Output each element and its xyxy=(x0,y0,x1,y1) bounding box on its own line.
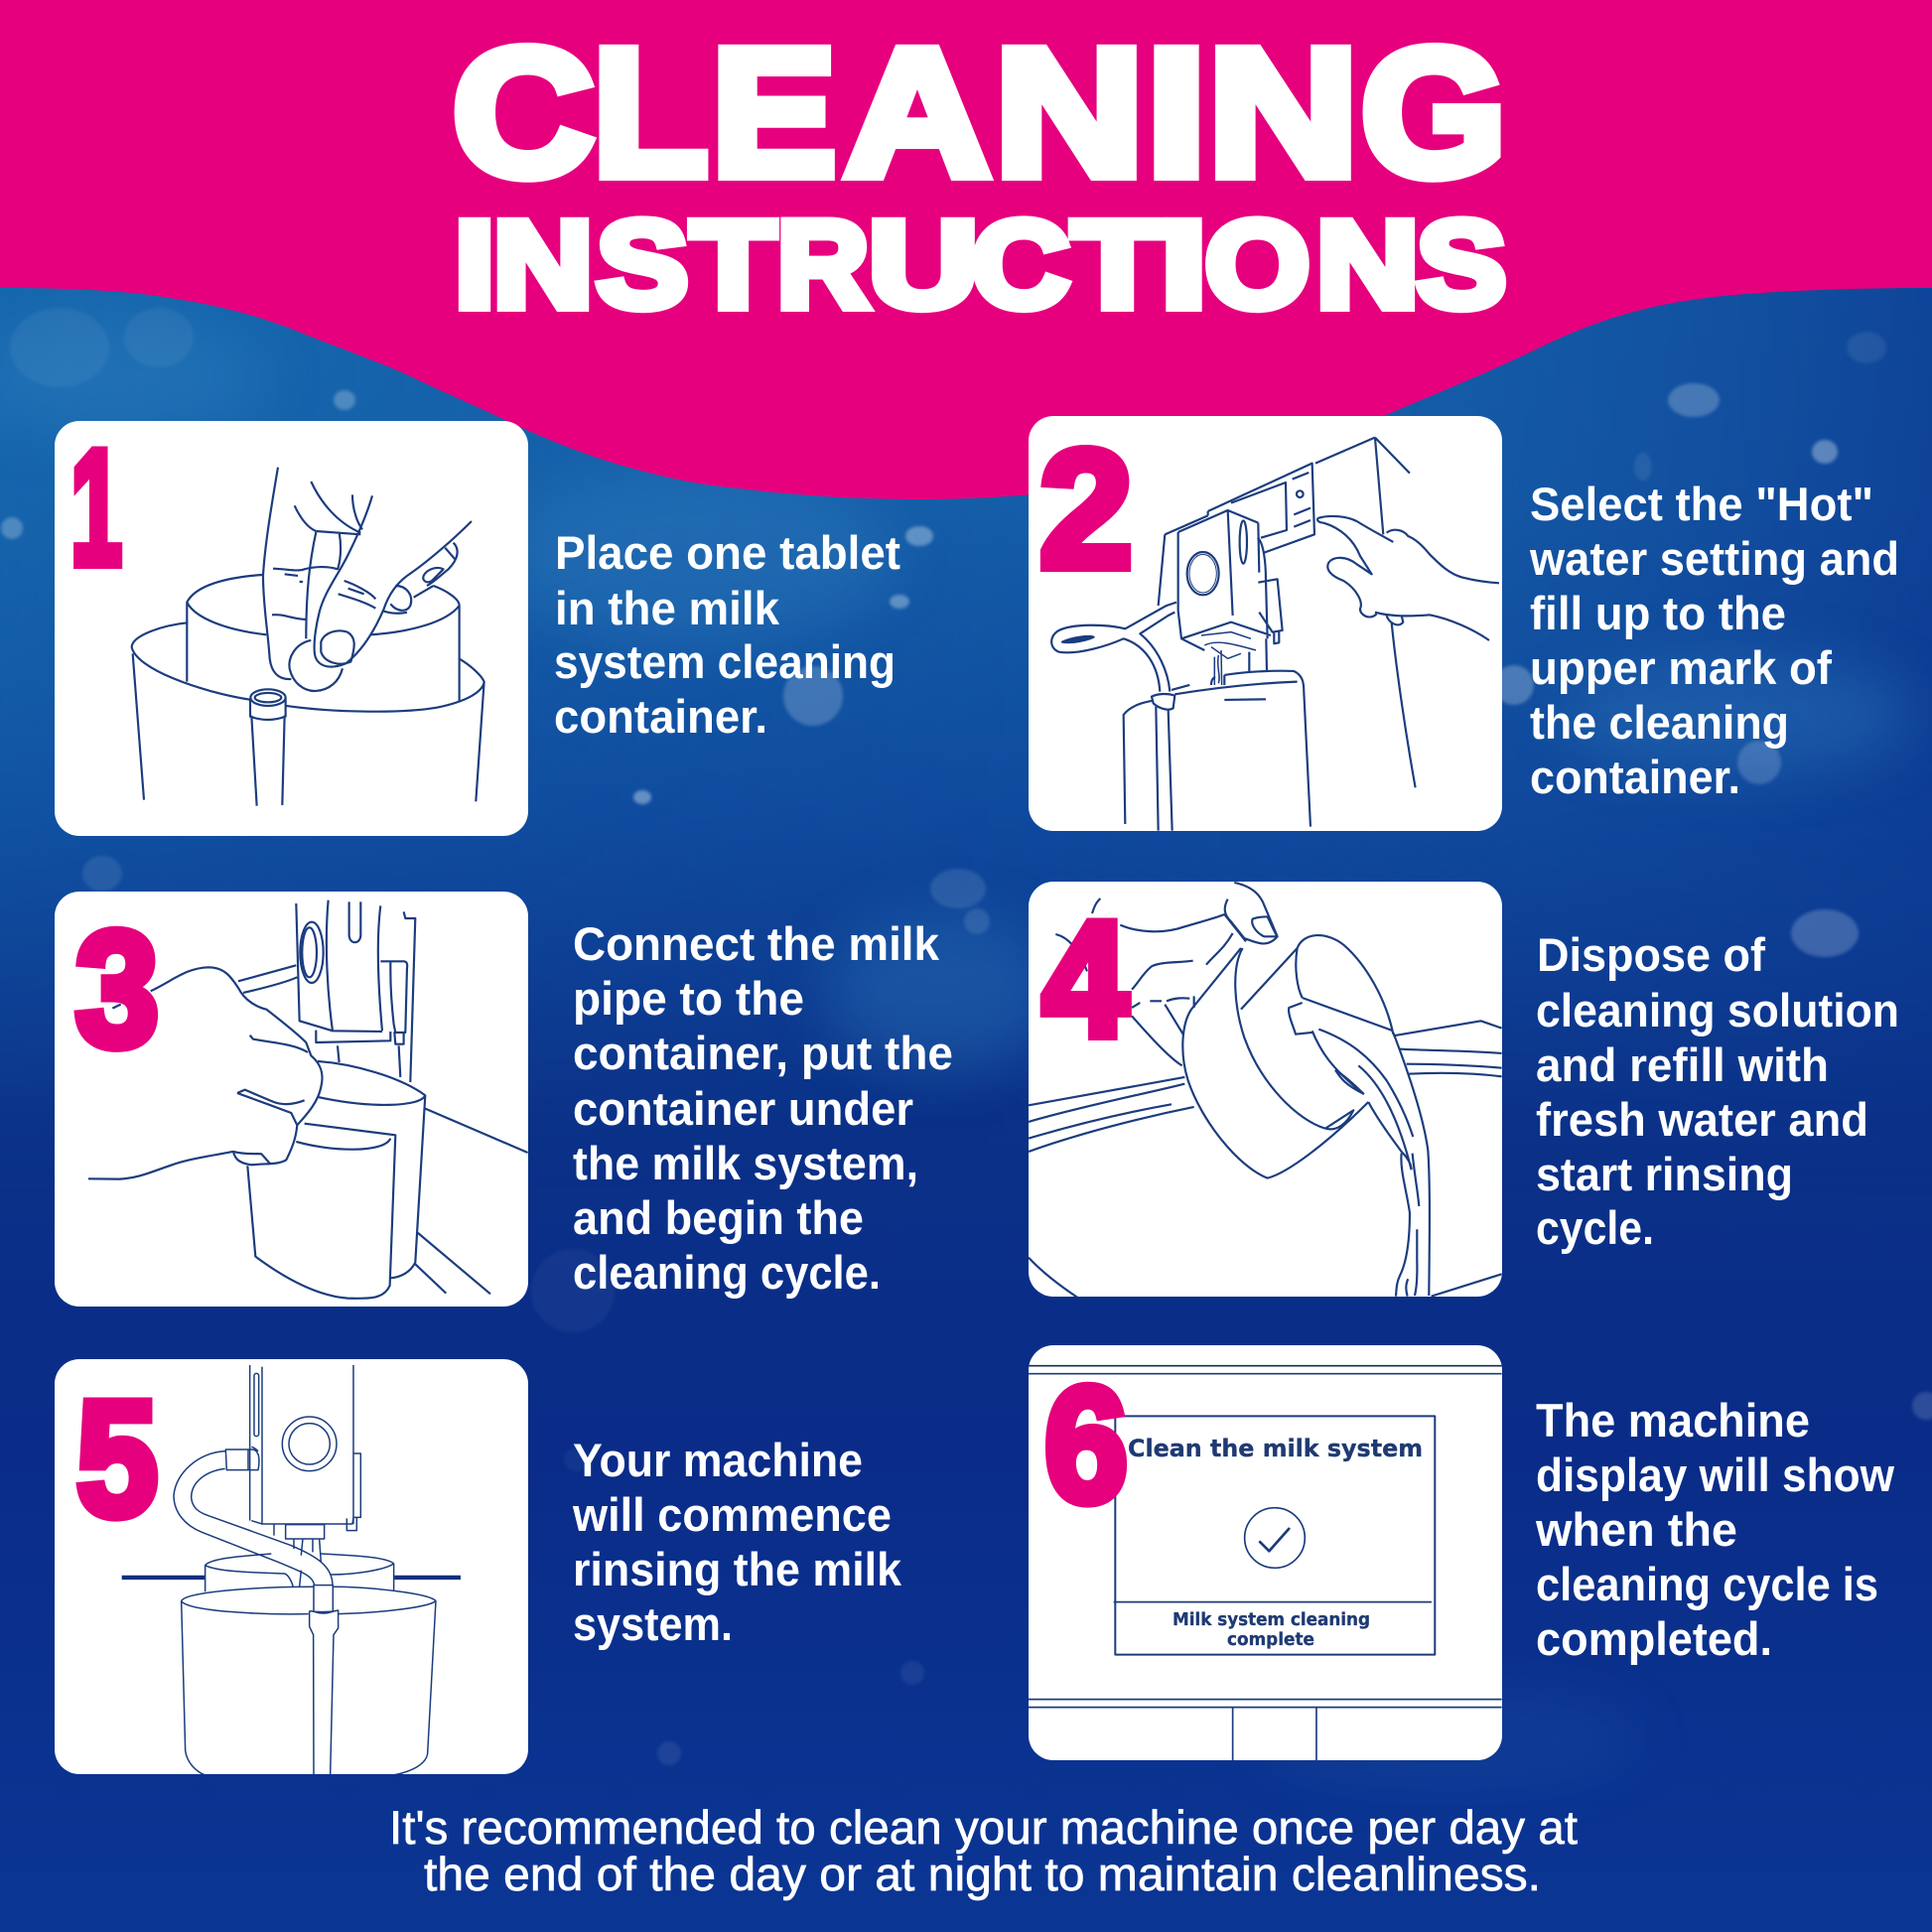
text: step 5: will commence xyxy=(572,1488,892,1541)
pink header wave xyxy=(0,0,1932,499)
number 4: 4 xyxy=(1042,888,1128,1070)
panel: step 4 xyxy=(1029,882,1502,1298)
text: step 1 xyxy=(554,526,900,743)
text: step 2: container. xyxy=(1530,751,1740,803)
background: blue water with bokeh xyxy=(0,288,1932,1777)
title: L xyxy=(593,11,708,213)
title: C xyxy=(972,197,1069,334)
display text: Milk system cleaning xyxy=(1173,1609,1370,1630)
title xyxy=(453,11,1506,334)
text: step 2: the cleaning xyxy=(1530,696,1789,749)
number 5: 5 xyxy=(76,1367,158,1550)
footer note xyxy=(389,1801,1578,1900)
number 1: 1 xyxy=(70,416,122,599)
text: step 4: start rinsing xyxy=(1536,1148,1793,1200)
text: step 4: cycle. xyxy=(1536,1201,1654,1254)
title: U xyxy=(869,197,978,334)
illustration: selecting hot water on machine xyxy=(1051,438,1499,831)
illustration: pouring out cleaning solution xyxy=(1029,883,1502,1298)
text: step 6 xyxy=(1535,1394,1894,1665)
text: step 5: Your machine xyxy=(573,1434,863,1486)
text: step 6: The machine xyxy=(1536,1394,1810,1447)
title: I xyxy=(1162,197,1206,334)
text: step 5: system. xyxy=(573,1597,733,1650)
title: T xyxy=(1072,197,1163,334)
title: I xyxy=(1147,11,1206,213)
text: step 6: cleaning cycle is xyxy=(1536,1558,1878,1610)
text: step 3 xyxy=(573,917,953,1299)
title: I xyxy=(455,197,494,334)
text: step 3: the milk system, xyxy=(573,1137,918,1189)
text: step 1: Place one tablet xyxy=(555,526,900,579)
text: step 2: Select the "Hot" xyxy=(1530,478,1873,530)
title: N xyxy=(995,11,1144,213)
number 3: 3 xyxy=(75,897,159,1080)
text: step 4: cleaning solution xyxy=(1536,984,1899,1036)
illustration: machine rinsing milk system xyxy=(122,1365,461,1775)
title: N xyxy=(1316,197,1419,334)
text: step 5 xyxy=(572,1434,902,1650)
number 6: 6 xyxy=(1044,1353,1128,1536)
text: step 5: rinsing the milk xyxy=(573,1543,902,1595)
text: step 3: pipe to the xyxy=(573,972,804,1025)
text: step 3: container under xyxy=(573,1082,913,1135)
footer note: the end of the day or at night to maintain cleanliness. xyxy=(424,1848,1541,1900)
panel: step 6 xyxy=(1029,1345,1502,1760)
illustration: tablet dropped in container xyxy=(132,468,484,806)
display text: Clean the milk system xyxy=(1128,1435,1423,1462)
panel: step 3 xyxy=(55,892,528,1307)
title: E xyxy=(712,11,836,213)
text: step 2: water setting and xyxy=(1529,532,1899,585)
text: step 2: upper mark of xyxy=(1530,641,1832,694)
panel: step 2 xyxy=(1029,415,1502,831)
text: step 3: container, put the xyxy=(573,1027,953,1079)
title: C xyxy=(453,11,594,213)
title: N xyxy=(493,197,593,334)
text: step 2: fill up to the xyxy=(1530,587,1786,639)
text: step 3: Connect the milk xyxy=(573,917,940,970)
title: A xyxy=(845,11,990,213)
text: step 6: display will show xyxy=(1536,1449,1894,1501)
title: O xyxy=(1205,197,1310,334)
text: step 2 xyxy=(1529,478,1899,803)
title: T xyxy=(691,197,775,334)
title: S xyxy=(1417,197,1506,334)
title: N xyxy=(1208,11,1358,213)
text: step 4: fresh water and xyxy=(1536,1093,1868,1146)
text: step 4: Dispose of xyxy=(1537,928,1765,981)
title: G xyxy=(1361,11,1506,213)
display text: complete xyxy=(1227,1629,1314,1650)
text: step 1: system cleaning xyxy=(554,635,896,688)
display text xyxy=(1128,1435,1423,1650)
title: S xyxy=(597,197,688,334)
text: step 6: completed. xyxy=(1536,1612,1772,1665)
text: step 1: in the milk xyxy=(555,582,780,634)
number 2: 2 xyxy=(1039,415,1133,603)
panel: step 5 xyxy=(55,1359,528,1775)
footer note: It's recommended to clean your machine once per day at xyxy=(389,1801,1578,1854)
panel: step 1 xyxy=(55,416,528,836)
text: step 1: container. xyxy=(554,690,767,743)
text: step 3: cleaning cycle. xyxy=(573,1246,881,1299)
text: step 4 xyxy=(1536,928,1899,1254)
text: step 6: when the xyxy=(1535,1503,1737,1556)
text: step 4: and refill with xyxy=(1536,1038,1829,1091)
illustration: machine display xyxy=(1029,1366,1502,1760)
text: step 3: and begin the xyxy=(573,1191,864,1244)
illustration: hand placing container under milk system xyxy=(88,900,528,1299)
title: R xyxy=(777,197,869,334)
